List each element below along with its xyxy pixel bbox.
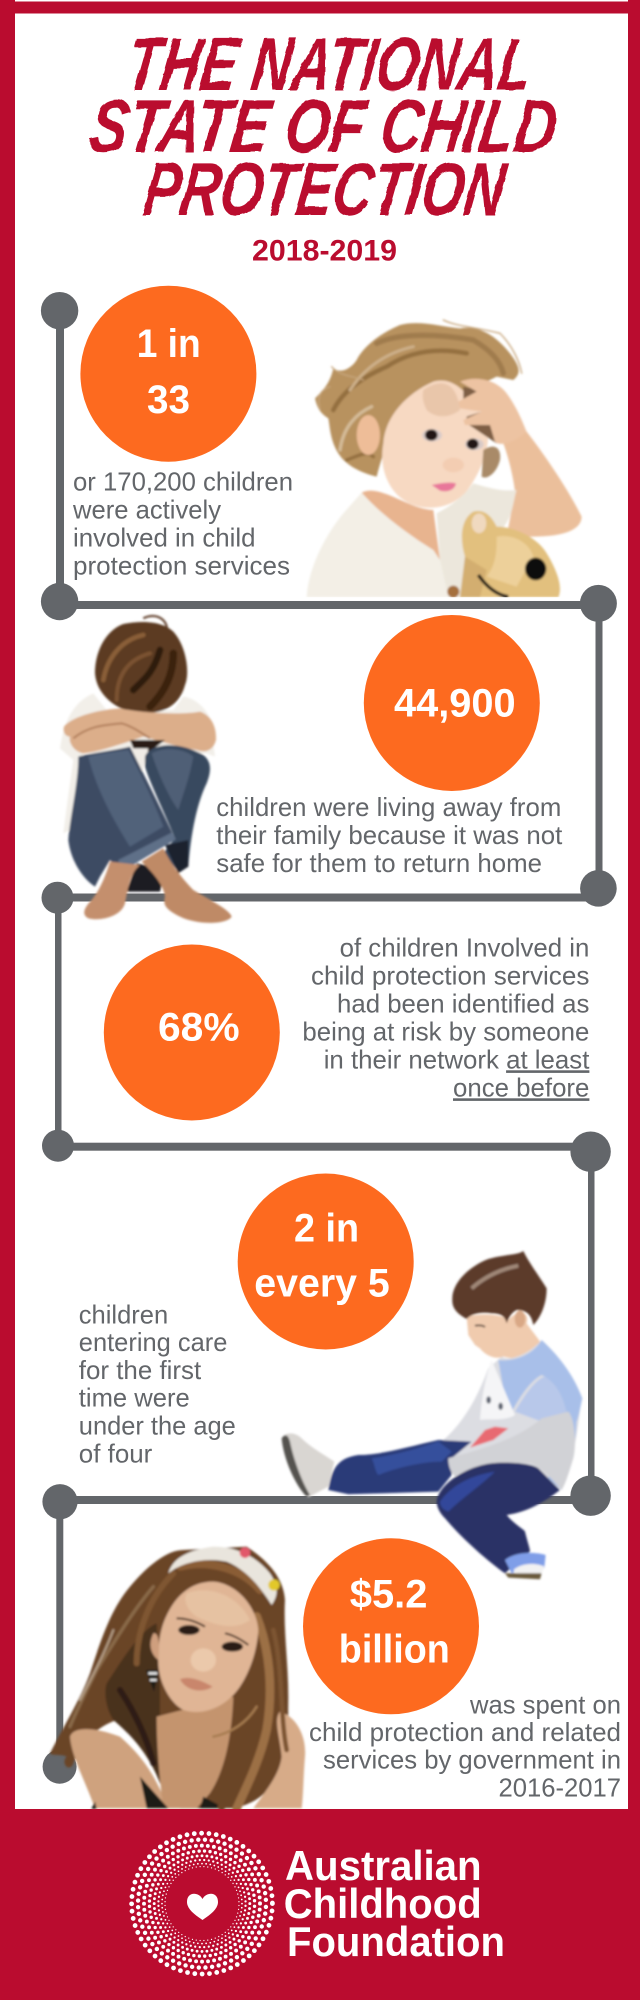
stat circle: $5.2 billion: $5.2 [350,1572,427,1616]
text: 170,200 children: protection services [73,551,290,581]
stat circle: 1 in 33: 33 [147,378,190,422]
text: entering care under four: children [79,1299,168,1329]
stat circle: 68%: 68% [158,1006,240,1050]
stat circle: $5.2 billion [303,1538,479,1714]
text: spending: services by government in [323,1745,621,1775]
text: identified at risk before: in their network at least [324,1044,590,1074]
text: entering care under four: entering care [79,1327,227,1357]
logo wordmark: Childhood [284,1880,482,1927]
text: 170,200 children: or 170,200 children [73,467,293,497]
text: 170,200 children [72,467,293,581]
title [85,22,563,231]
text: spending: was spent on [469,1689,621,1719]
text: 170,200 children: were actively [72,495,221,525]
text: spending: child protection and related [309,1717,621,1747]
text: entering care under four: for the first [79,1355,202,1385]
stat circle: $5.2 billion: billion [339,1628,450,1672]
photo: boy sitting on line [282,1251,582,1579]
text: spending [309,1689,621,1803]
stat circle: 1 in 33 [80,286,256,462]
text: identified at risk before: being at risk by someone [302,1016,589,1046]
stat circle: 2 in every 5: every 5 [254,1262,390,1306]
text: entering care under four [79,1299,236,1468]
logo wordmark: Australian [285,1842,482,1889]
stat circle: 44,900 [364,615,540,791]
subtitle: years: 2018-2019 [252,234,397,268]
photo: boy hugging knees [60,616,232,923]
text: identified at risk before [302,933,590,1102]
stat circle: 2 in every 5 [238,1174,414,1350]
text: entering care under four: of four [79,1438,153,1468]
icon: heart [187,1894,218,1920]
logo wordmark [284,1842,505,1965]
text: identified at risk before: had been identified as [337,988,589,1018]
title: PROTECTION [139,147,512,231]
text: identified at risk before: child protection services [311,960,589,990]
text: identified at risk before: once before [453,1072,589,1102]
stat circle: 2 in every 5: 2 in [294,1207,359,1251]
logo wordmark: Foundation [287,1918,505,1965]
text: living away from family: children were living away from [216,792,561,822]
photo: girl with teddy bear [307,320,582,598]
text: living away from family: their family because it was not [216,820,563,850]
photo: teenage girl [50,1547,305,1809]
stat circle: 44,900: 44,900 [394,682,516,726]
text: entering care under four: under the age [79,1410,236,1440]
text: entering care under four: time were [79,1383,190,1413]
text: 170,200 children: involved in child [73,523,256,553]
connector line network [41,292,617,1784]
text: living away from family [216,792,563,878]
text: spending: 2016-2017 [498,1773,621,1803]
text: living away from family: safe for them to return home [216,848,542,878]
stat circle: 68% [104,944,280,1120]
text: identified at risk before: of children Involved in [340,933,589,963]
logo: dotted ring with heart [132,1833,272,1974]
stat circle: 1 in 33: 1 in [137,322,201,366]
